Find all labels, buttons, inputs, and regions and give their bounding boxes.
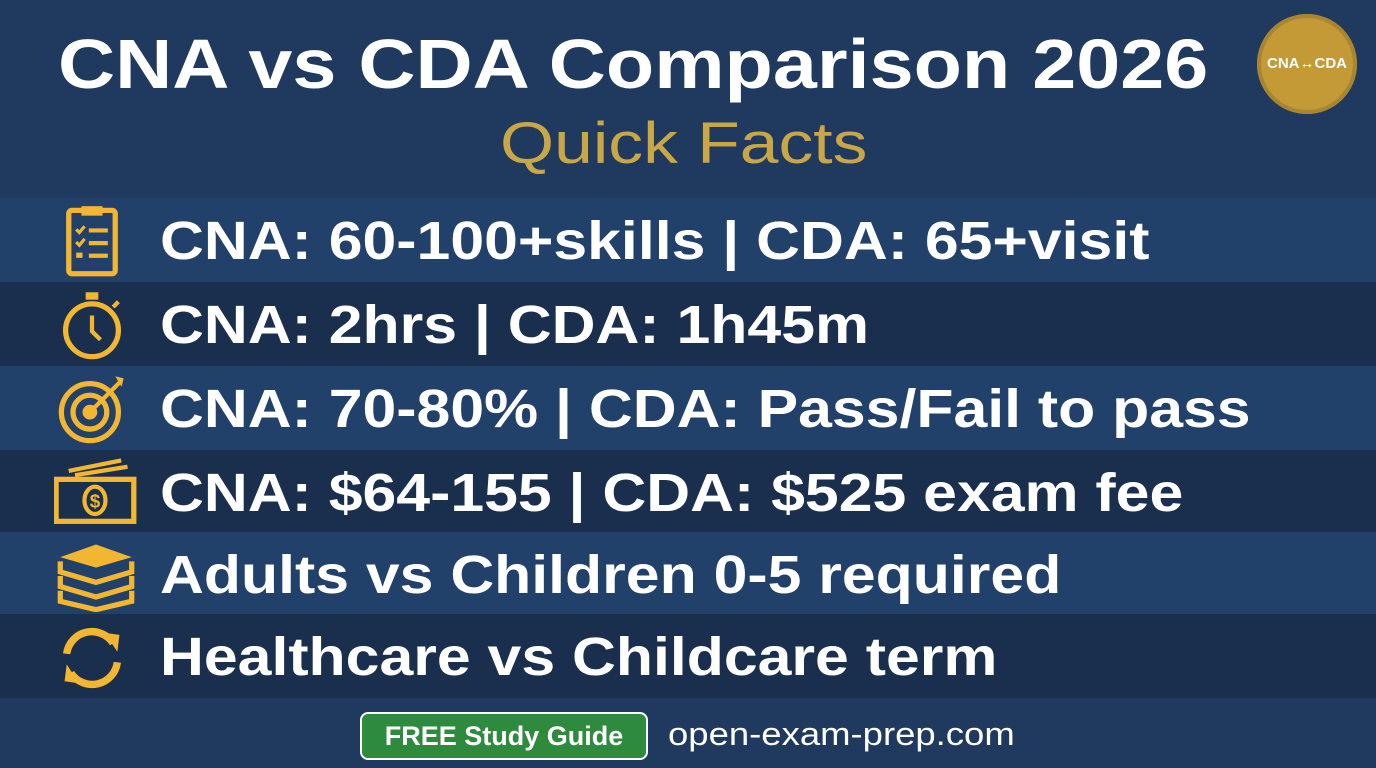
- icon: money: $: [90, 492, 101, 513]
- icon: target: [58, 376, 124, 444]
- footer button: [360, 712, 648, 760]
- icon: clipboard: [66, 206, 118, 276]
- row 2: time: [0, 282, 1376, 366]
- footer button: FREE Study Guide: [385, 721, 623, 751]
- subtitle: Quick Facts: [500, 111, 867, 176]
- row 2: time: CNA: 2hrs | CDA: 1h45m: [160, 295, 869, 355]
- footer url: open-exam-prep.com: [668, 716, 1015, 752]
- badge: CNA↔CDA: CNA↔CDA: [1267, 55, 1347, 72]
- row 4: cost: CNA: $64-155 | CDA: $525 exam fee: [160, 463, 1183, 523]
- icon: money: [54, 458, 136, 524]
- icon: stopwatch: [62, 292, 121, 360]
- badge: CNA↔CDA: [1257, 14, 1357, 114]
- row 1: skills: [0, 198, 1376, 282]
- row 5: population: Adults vs Children 0-5 required: [160, 545, 1061, 605]
- row 1: skills: CNA: 60-100+skills | CDA: 65+visit: [160, 211, 1149, 271]
- icon: refresh arrows: [63, 628, 121, 688]
- row 3: passing: [0, 366, 1376, 450]
- title: CNA vs CDA Comparison 2026: [58, 25, 1208, 103]
- row 4: cost: [0, 450, 1376, 534]
- row 5: population: [0, 532, 1376, 616]
- row 3: passing: CNA: 70-80% | CDA: Pass/Fail to pass: [160, 379, 1251, 439]
- icon: books: [58, 544, 134, 612]
- row 6: field: Healthcare vs Childcare term: [160, 627, 997, 687]
- row 6: field: [0, 614, 1376, 698]
